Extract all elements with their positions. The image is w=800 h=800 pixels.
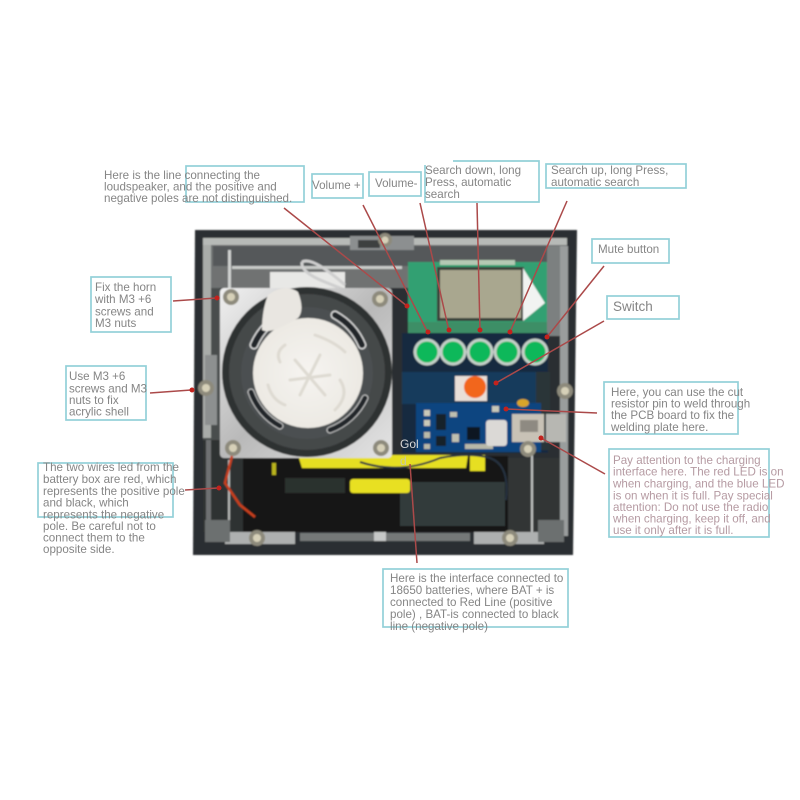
callout: charging interface: attention: Do not use the radio	[613, 501, 768, 514]
callout: volume plus: Volume +	[312, 179, 361, 192]
bottom acrylic strips	[225, 532, 295, 544]
callout: battery interface: 18650 batteries, where BAT + is	[390, 584, 554, 597]
callout: battery wires: represents the negative	[43, 508, 164, 522]
green buttons	[414, 338, 548, 366]
callout: charging interface	[609, 449, 784, 537]
callout: battery interface: pole) , BAT-is connected to black	[390, 608, 559, 621]
callout: welding plate	[604, 382, 750, 434]
acrylic rim	[203, 236, 568, 544]
device photo: radio in acrylic case	[193, 230, 577, 555]
callout: fix the horn: M3 nuts	[95, 317, 136, 330]
callout: loudspeaker line: negative poles are not distinguished.	[104, 192, 292, 205]
case outer frame	[193, 230, 577, 555]
callout: fix the horn	[91, 277, 171, 332]
main PCB	[402, 333, 550, 453]
callout: acrylic shell: nuts to fix	[69, 394, 119, 407]
callout: loudspeaker line: loudspeaker, and the positive and	[104, 180, 277, 194]
callout: battery wires: pole. Be careful not to	[43, 520, 156, 533]
screws	[198, 233, 573, 546]
callout: fix the horn: Fix the horn	[95, 281, 156, 294]
callout: search down: Search down, long	[425, 164, 521, 177]
callout: charging interface: when charging, and the blue LED	[612, 478, 784, 490]
callout: battery wires: battery box are red, which	[43, 473, 176, 486]
callout: welding plate: Here, you can use the cut	[611, 386, 744, 399]
callout: acrylic shell	[66, 366, 147, 420]
callout: volume minus: Volume-	[375, 177, 418, 190]
callout: acrylic shell: acrylic shell	[69, 406, 129, 418]
red battery wire	[225, 456, 255, 517]
speaker wire loop	[302, 261, 345, 290]
callout: mute button	[592, 239, 669, 263]
callout: battery interface: connected to Red Line (positive	[390, 596, 552, 609]
callout: loudspeaker line	[104, 166, 304, 205]
speaker dome	[253, 318, 363, 428]
callout: welding plate: resistor pin to weld through	[611, 398, 750, 410]
orange power switch	[455, 376, 487, 401]
callout: search up: automatic search	[551, 176, 639, 189]
callout: search up	[546, 164, 686, 189]
label on photo: Gold	[400, 437, 419, 468]
callout: acrylic shell: Use M3 +6	[69, 370, 125, 383]
callout: volume minus	[369, 172, 421, 196]
callout: mute button: Mute button	[598, 243, 659, 256]
callout: charging interface: interface here. The red LED is on	[613, 466, 784, 478]
callout: fix the horn: with M3 +6	[94, 293, 151, 306]
callout: search down: search	[425, 188, 460, 201]
callout: charging interface: is on when it is full. Pay special	[613, 490, 773, 502]
callout: battery interface	[383, 569, 568, 633]
LCD screen	[437, 267, 524, 321]
arrows	[150, 201, 605, 563]
callout: battery wires: and black, which	[43, 496, 129, 510]
callout: battery wires: The two wires led from the	[43, 461, 179, 474]
callout: charging interface: when charging, keep it off, and	[612, 512, 771, 526]
callout: fix the horn: screws and	[95, 306, 154, 318]
LCD board	[408, 260, 547, 333]
label on photo: Gold: d	[400, 454, 407, 468]
callout: search up: Search up, long Press,	[551, 164, 668, 177]
battery holder	[243, 455, 508, 532]
callout: search down: Press, automatic	[425, 176, 512, 189]
speaker	[220, 287, 392, 458]
right connector	[546, 414, 566, 442]
label on photo: Gold: Gol	[400, 437, 419, 451]
callout: switch	[607, 296, 679, 319]
callout: battery wires: opposite side.	[43, 543, 115, 556]
callout: battery interface: line (negative pole)	[390, 620, 488, 633]
callout: search down	[425, 161, 539, 202]
callout: loudspeaker line: Here is the line connecting the	[104, 169, 260, 182]
callout: battery interface: Here is the interface connected to	[390, 572, 563, 585]
callout: charging interface: use it only after it is full.	[613, 524, 734, 537]
callout: welding plate: the PCB board to fix the	[611, 409, 734, 422]
callout: battery wires: represents the positive pole	[43, 485, 185, 498]
callout: battery wires: connect them to the	[43, 532, 145, 544]
callout: welding plate: welding plate here.	[610, 421, 708, 434]
callout: switch: Switch	[613, 299, 653, 314]
callout: volume plus	[312, 174, 363, 198]
charging board	[416, 399, 544, 452]
callout: battery wires	[38, 461, 185, 556]
speaker vents	[251, 313, 365, 430]
callout: acrylic shell: screws and M3	[69, 382, 147, 396]
callout: charging interface: Pay attention to the charging	[613, 454, 761, 467]
